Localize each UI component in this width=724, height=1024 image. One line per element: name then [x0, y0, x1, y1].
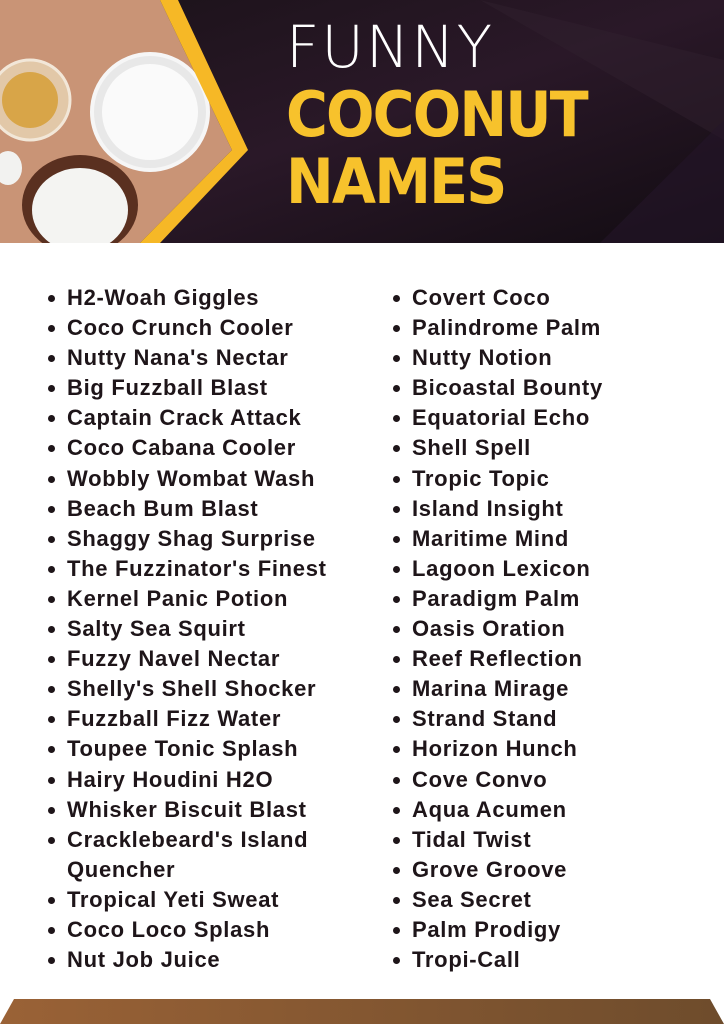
list: right column: Tidal Twist: [412, 827, 531, 852]
icon: yellow chevron: [140, 0, 248, 243]
list: left column: [48, 285, 327, 972]
list: left column: Coco Cabana Cooler: [67, 435, 296, 460]
title: FUNNY: [286, 13, 494, 81]
list: left column: Beach Bum Blast: [67, 496, 258, 521]
list: right column: Oasis Oration: [412, 616, 565, 641]
list: right column: Marina Mirage: [412, 676, 569, 701]
list: left column: Quencher: [67, 857, 175, 882]
list: right column: [393, 285, 603, 972]
photo: coconut and oil: [0, 0, 232, 255]
header banner: [0, 0, 724, 243]
list: left column: Whisker Biscuit Blast: [67, 797, 307, 822]
list: right column: Aqua Acumen: [412, 797, 567, 822]
list: left column: Wobbly Wombat Wash: [67, 466, 315, 491]
list: left column: Salty Sea Squirt: [67, 616, 246, 641]
list: left column: Toupee Tonic Splash: [67, 736, 298, 761]
list: right column: Covert Coco: [412, 285, 550, 310]
list: left column: The Fuzzinator's Finest: [67, 556, 327, 581]
title: [286, 13, 588, 218]
footer bar: [0, 999, 724, 1024]
list: right column: Lagoon Lexicon: [412, 556, 590, 581]
list: left column: Kernel Panic Potion: [67, 586, 288, 611]
list: right column: Palindrome Palm: [412, 315, 601, 340]
list: right column: Tropi-Call: [412, 947, 520, 972]
list: right column: Bicoastal Bounty: [412, 375, 603, 400]
list: left column: Hairy Houdini H2O: [67, 766, 273, 792]
list: right column: Sea Secret: [412, 887, 532, 912]
list: right column: Horizon Hunch: [412, 736, 578, 761]
list: right column: Island Insight: [412, 496, 564, 521]
list: left column: Fuzzball Fizz Water: [67, 706, 281, 731]
list: right column: Grove Groove: [412, 857, 567, 882]
list: left column: Tropical Yeti Sweat: [67, 887, 279, 912]
list: right column: Equatorial Echo: [412, 405, 590, 430]
list: right column: Strand Stand: [412, 706, 557, 731]
list: right column: Shell Spell: [412, 435, 531, 460]
list: left column: Big Fuzzball Blast: [67, 375, 268, 400]
list: left column: Fuzzy Navel Nectar: [67, 646, 280, 671]
title: COCONUT: [286, 78, 587, 151]
list: right column: Tropic Topic: [412, 466, 550, 491]
list: left column: Coco Loco Splash: [67, 917, 270, 942]
list: right column: Paradigm Palm: [412, 586, 580, 611]
list: right column: Nutty Notion: [412, 345, 552, 370]
list: right column: Cove Convo: [412, 766, 547, 792]
list: right column: Reef Reflection: [412, 646, 583, 671]
list: left column: Captain Crack Attack: [67, 405, 301, 430]
list: left column: Cracklebeard's Island: [67, 827, 308, 852]
list: left column: Shaggy Shag Surprise: [67, 526, 316, 551]
list: right column: Palm Prodigy: [412, 917, 561, 942]
list: right column: Maritime Mind: [412, 526, 569, 551]
title: NAMES: [286, 145, 505, 218]
list: left column: Shelly's Shell Shocker: [67, 676, 316, 701]
list: left column: Nut Job Juice: [67, 947, 220, 972]
list: left column: Coco Crunch Cooler: [67, 315, 294, 340]
list: left column: H2-Woah Giggles: [67, 285, 259, 310]
list: left column: Nutty Nana's Nectar: [67, 345, 288, 370]
